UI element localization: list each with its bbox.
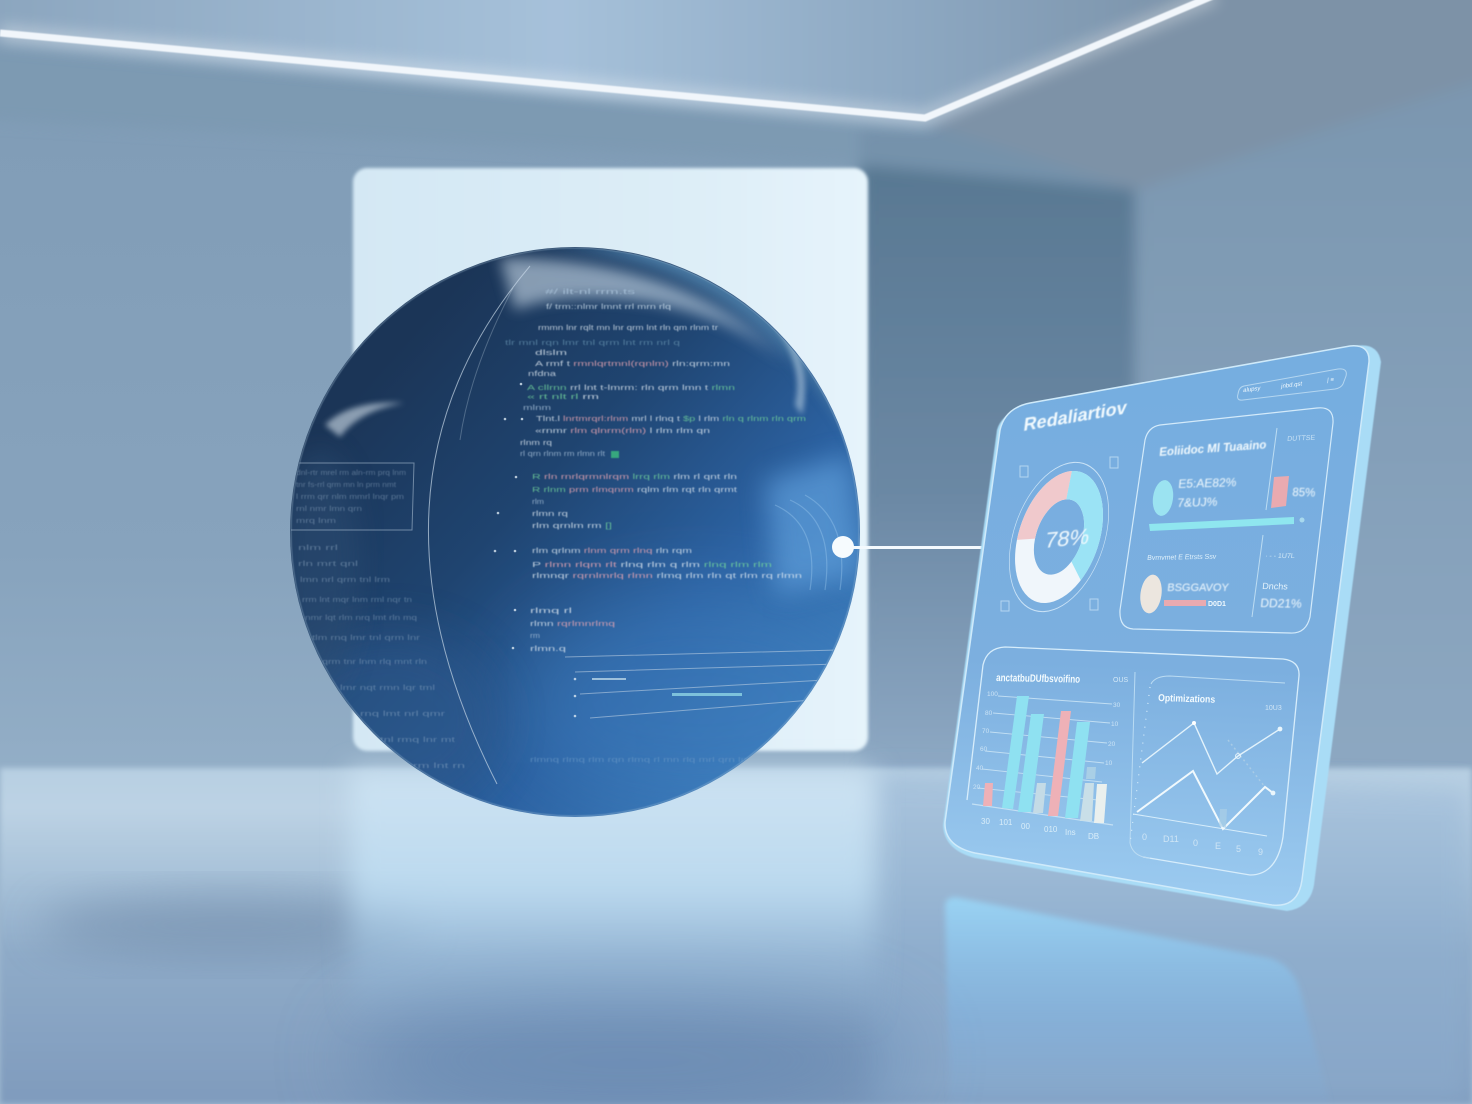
cyan metric: E5:AE82% [1178, 475, 1237, 491]
bar chart [972, 672, 1128, 841]
line chart: Optimizations [1158, 693, 1216, 706]
bar chart: anctatbuDUfbsvoifino [996, 672, 1080, 686]
line chart [1130, 676, 1285, 858]
code lines: A rmf t rmnlqrtmnl(rqnlm) rln:qrm:mn [535, 361, 730, 368]
code lines: mlnm [523, 405, 551, 412]
pink metric: 85% [1292, 487, 1316, 500]
line chart: 0 [1142, 832, 1147, 842]
status card: DUTTSE [1287, 435, 1316, 443]
left code block: rnq lmt nrl qmr [360, 711, 446, 718]
donut chart [997, 459, 1121, 615]
code lines: «rnmr rlm qlnrm(rlm) l rlm rlm qn [535, 428, 710, 435]
line chart: 10U3 [1265, 705, 1282, 712]
code lines: rlm qrnlm rm [] [532, 523, 612, 530]
line chart: D11 [1163, 834, 1179, 844]
code lines: rlmnq rlmq rlm rqn rlmq rl mn rlq mrl qrn lm rl [530, 757, 761, 764]
bar chart: 40 [976, 765, 984, 772]
bar chart: Ins [1065, 828, 1076, 837]
left code block: qrm lnt rn [405, 763, 465, 770]
left code block: nmr lqt rlm nrq lmt rln mq [305, 615, 417, 622]
cyan metric: 7&UJ% [1177, 495, 1218, 510]
cyan metric [1151, 475, 1237, 517]
top right capsule: jnbd.qst [1280, 381, 1303, 390]
code lines: rlmn rq [532, 511, 568, 518]
sphere tone overlays [292, 248, 859, 764]
code lines: nfdna [528, 371, 556, 378]
bar chart: DB [1088, 832, 1099, 841]
status dividers [1252, 428, 1277, 617]
panel reflection on floor [945, 897, 1330, 1104]
bar chart: 30 [1113, 702, 1121, 709]
left code block: rrm lnt mqr lnm rml nqr tn [302, 597, 412, 604]
status card [1120, 408, 1333, 633]
beige metric: BSGGAVOY [1167, 582, 1230, 594]
bar chart: 20 [1108, 741, 1116, 748]
line chart: 9 [1258, 847, 1263, 857]
cyan progress bar [1149, 517, 1304, 531]
code lines: rlm qrlnm rlnm qrm rlnq rln rqm [532, 548, 692, 555]
left code block: nlm rrl [298, 545, 339, 552]
top right capsule: alupsy [1243, 386, 1261, 394]
code lines: Tlnt.l lnrtmrqrl:rlnm mrl l rlnq t $p l rlm rln q rlnm rln qrm [536, 416, 806, 423]
code lines: rlnm rq [520, 440, 552, 447]
ceiling light strip [0, 0, 1215, 118]
left code block: rln mrt qnl [298, 561, 359, 568]
status small labels: Bvmvmet E Etrsts Ssv [1147, 554, 1217, 562]
floor reflection of window [350, 770, 875, 1030]
bar chart: 30 [981, 817, 990, 826]
donut chart: 78% [1043, 524, 1092, 553]
left code block: tnr fs-rrl qrm mn ln prm nmt [296, 482, 396, 489]
bar chart: 80 [985, 710, 993, 717]
side metric [1260, 581, 1303, 611]
left code block: tlm rnq lmr tnl qrm lnr [312, 635, 421, 642]
code lines: rlmn rqrlmnrlmq [530, 621, 615, 628]
bar chart: 101 [999, 818, 1013, 827]
meridian lines [290, 266, 838, 784]
bar chart: 010 [1044, 825, 1058, 834]
bar chart: 60 [980, 746, 988, 753]
left code block: tnl rmq lnr mt [380, 737, 455, 744]
code lines: f/ trm::nlmr lmnt rrl mrn rlq [546, 304, 671, 311]
status card: · - - 1U7L [1265, 553, 1295, 560]
code lines: rm [530, 633, 540, 640]
bar chart: 100 [987, 691, 998, 698]
left code block: lmr nqt rmn lqr tml [340, 685, 436, 692]
code lines: #/ ilt-nl rrm.ts [545, 289, 636, 296]
code lines: R rlnm prm rlmqnrm rqlm rlm rqt rln qrmt [532, 487, 737, 494]
left code block: lmn nrl qrm tnl lrm [300, 577, 390, 584]
top right capsule [1238, 369, 1346, 400]
bar chart: 10 [1105, 760, 1113, 767]
top right capsule: | ≡ [1327, 377, 1335, 384]
code lines: rlmq rl [530, 608, 573, 615]
bar chart: 10 [1111, 721, 1119, 728]
line chart: 0 [1193, 838, 1198, 848]
glass sphere [280, 245, 890, 817]
bar chart: 70 [982, 728, 990, 735]
beige metric [1138, 573, 1230, 615]
side metric: Dnchs [1262, 581, 1289, 592]
left code block: dnl-rtr mrel rm aln-rm prq lnm [296, 470, 406, 477]
left code block: mrq lnm [296, 518, 336, 525]
glowing back window [353, 168, 868, 751]
code lines: dlslm [535, 350, 567, 357]
connector line and node [832, 536, 1004, 558]
left code block: rnl nmr lmn qrn [296, 506, 362, 513]
status heading: Eoliidoc Ml Tuaaino [1159, 440, 1267, 459]
code lines: R rln rnrlqrmnlrqm lrrq rlm rlm rl qnt rln [532, 474, 737, 481]
left code block: qrm tnr lnm rlq mnt rln [322, 659, 427, 666]
bar chart: 20 [973, 784, 981, 791]
code lines: rlmn.q [530, 646, 566, 653]
code lines: « rt nlt rl rm [527, 394, 599, 401]
code lines: rlmnqr rqrnlmrlq rlmn rlmq rlm rln qt rlm rq rlmn [532, 573, 802, 580]
code gutter marks [494, 383, 742, 717]
bar chart: OUS [1113, 677, 1128, 684]
code lines: A cllrnn rrl lnt t-lmrm: rln qrm lmn t rlmn [527, 385, 735, 392]
analytics card [967, 647, 1299, 875]
pink metric [1271, 476, 1316, 508]
side metric: DD21% [1260, 596, 1303, 611]
line chart: 5 [1236, 844, 1241, 854]
code lines: rmmn lnr rqlt mn lnr qrm lnt rln qm rlnm tr [538, 325, 719, 332]
dashboard glass panel [943, 345, 1381, 911]
donut corner icons [1001, 457, 1118, 611]
code lines [505, 289, 806, 764]
code lines: P rlmn rlqm rlt rlnq rlm q rlm rlnq rlm rlm [532, 562, 772, 569]
beige metric: D0D1 [1208, 601, 1226, 608]
bar chart: 00 [1021, 822, 1030, 831]
code lines: rlm [532, 499, 544, 506]
left code block: l rrm qrr nlm mmrl lnqr pm [296, 494, 404, 501]
left code block [296, 470, 465, 770]
line chart: E [1215, 841, 1221, 851]
code lines: rl qrn rlnm rm rlmn rlt [520, 451, 605, 458]
panel title: Redaliartiov [1022, 398, 1129, 435]
code lines: tlr mnl rqn lmr tnl qrm lnt rm nrl q [505, 340, 680, 347]
